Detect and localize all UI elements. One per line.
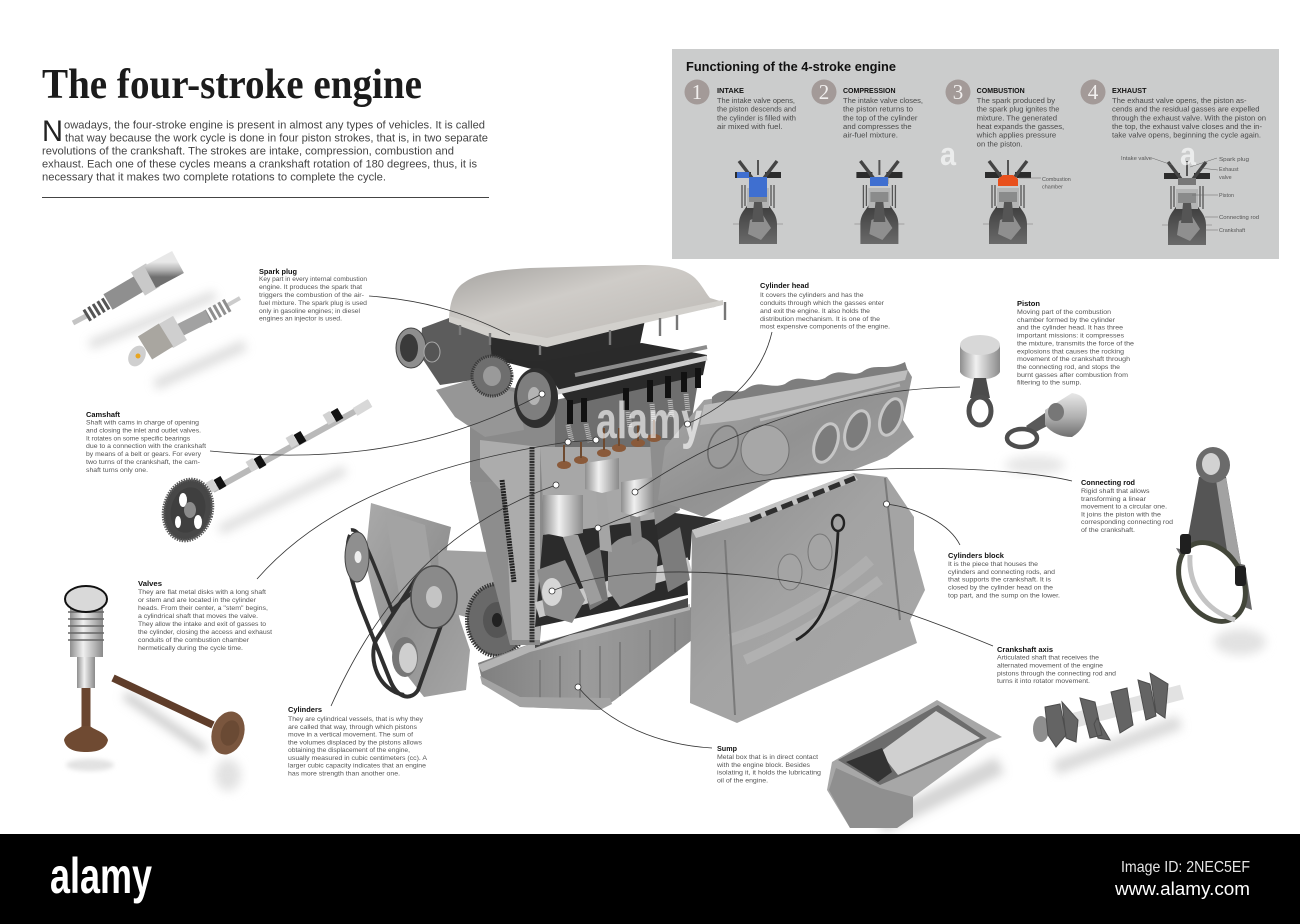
label: cylinders block: closed by the cylinder head on the xyxy=(948,585,1053,592)
detached cylinder head xyxy=(658,362,914,517)
step 1: intake: air mixed with fuel. xyxy=(717,122,782,131)
step 1: intake: 1 xyxy=(692,80,702,104)
label: camshaft: shaft turns only one. xyxy=(86,467,148,474)
title: The four-stroke engine xyxy=(42,62,422,108)
step 3: combustion: The spark produced by xyxy=(977,96,1055,105)
leader lines xyxy=(210,296,1072,748)
step 3: combustion: heat expands the gasses, xyxy=(977,122,1064,131)
label: camshaft: It rotates on some specific bearings xyxy=(86,435,191,442)
label: valves: conduits of the combustion chamber xyxy=(138,637,250,644)
camshaft gears on engine xyxy=(436,356,558,437)
label: piston: filtering to the sump. xyxy=(1017,380,1082,387)
engine watermark: alamy xyxy=(596,392,702,450)
label: crankshaft axis: turns it into rotator movement. xyxy=(997,678,1090,685)
step 4: exhaust xyxy=(1080,80,1266,245)
footer logo: alamy xyxy=(50,848,152,904)
label: cylinders: has more strength than another one. xyxy=(288,770,400,777)
intro paragraph: N xyxy=(42,115,63,148)
intro paragraph xyxy=(42,115,488,184)
label: cylinders xyxy=(288,705,428,777)
timing cover and accessory pulleys xyxy=(345,503,527,697)
label: spark plug: engines an injector is used. xyxy=(259,316,342,322)
label: sump: oil of the engine. xyxy=(717,777,768,784)
step 2: compression: 2 xyxy=(819,80,829,104)
label: crankshaft axis: alternated movement of the engine xyxy=(997,662,1103,669)
label: camshaft: two turns of the crankshaft, the cam- xyxy=(86,459,200,466)
label: piston: movement of the crankshaft through xyxy=(1017,356,1130,363)
step 4: exhaust: Piston xyxy=(1219,193,1234,199)
intro paragraph: necessary that it makes two complete rotations to complete the cycle. xyxy=(42,172,386,184)
label: piston: the connecting rod, and stops the xyxy=(1017,364,1120,371)
label: valves: a cylindrical shaft that moves the valve. xyxy=(138,613,258,620)
label: spark plug: Spark plug xyxy=(259,267,297,276)
label: spark plug: Key part in every internal combustion xyxy=(259,276,367,283)
step 2: compression: the piston returns to xyxy=(843,105,913,114)
label: spark plug: fuel mixture. The spark plug is used xyxy=(259,300,367,307)
label: spark plug: engine. It produces the spark that xyxy=(259,284,362,291)
part: pistons xyxy=(960,335,1087,474)
label: valves: They are flat metal disks with a long shaft xyxy=(138,589,266,596)
panel: functioning of the 4-stroke engine: a xyxy=(940,136,956,172)
label: valves xyxy=(138,579,272,652)
label: piston xyxy=(1017,299,1134,387)
label: valves: Valves xyxy=(138,579,162,588)
label: piston: and the cylinder head. It has three xyxy=(1017,325,1123,332)
label: camshaft: Camshaft xyxy=(86,410,120,419)
label: cylinders block: It is the piece that houses the xyxy=(948,561,1038,568)
label: valves: heads. From their center, a "stem" begins, xyxy=(138,605,268,612)
label: valves: the cylinder, closing the access and exhaust xyxy=(138,629,272,636)
label: cylinders: larger cubic capacity indicates that an engine xyxy=(288,762,426,770)
step 3: combustion: chamber xyxy=(1042,184,1063,190)
step 4: exhaust: Connecting rod xyxy=(1219,215,1259,221)
label: spark plug: triggers the combustion of the air- xyxy=(259,292,364,299)
website: www.alamy.com xyxy=(1114,879,1250,899)
label: crankshaft axis: pistons through the connecting rod and xyxy=(997,670,1116,677)
step 1: intake: The intake valve opens, xyxy=(717,96,795,105)
label: cylinders block: Cylinders block xyxy=(948,551,1005,560)
label: cylinder head: conduits through which the gasses enter xyxy=(760,300,885,307)
part: crankshaft xyxy=(1033,673,1182,768)
step 2: compression: The intake valve closes, xyxy=(843,96,923,105)
part: oil sump xyxy=(827,700,1002,828)
label: cylinders: usually measured in cubic centimeters (cc). A xyxy=(288,755,428,762)
label: cylinder head: most expensive components of the engine. xyxy=(760,324,890,330)
intro paragraph: revolutions of the crankshaft. The strokes are intake, compression, combustion and xyxy=(42,146,454,158)
panel: functioning of the 4-stroke engine: a xyxy=(1180,136,1196,172)
step 4: exhaust: valve xyxy=(1219,175,1232,181)
label: camshaft: by means of a belt or gears. For every xyxy=(86,451,202,458)
label: sump: with the engine block. Besides xyxy=(716,762,811,769)
label: cylinders: the volumes displaced by the pistons allows xyxy=(288,739,423,746)
label: cylinder head xyxy=(760,281,890,330)
label: piston: chamber formed by the cylinder xyxy=(1017,317,1116,324)
detached cylinders block xyxy=(690,473,925,723)
label: camshaft: and closing the inlet and outlet valves. xyxy=(86,427,201,434)
intro paragraph: owadays, the four-stroke engine is present in almost any types of vehicles. It is called xyxy=(64,120,485,132)
label: valves: or stem and are located in the cylinder xyxy=(138,597,257,604)
label: connecting rod: Connecting rod xyxy=(1081,478,1135,487)
step 4: exhaust: 4 xyxy=(1088,80,1099,104)
main engine cutaway xyxy=(345,265,925,723)
sump on engine xyxy=(478,598,692,710)
step 4: exhaust: the top, the exhaust valve closes and the in- xyxy=(1112,122,1262,131)
label: connecting rod xyxy=(1081,478,1173,534)
step 3: combustion: on the piston. xyxy=(977,139,1023,148)
label: cylinders block: that supports the crankshaft. It is xyxy=(948,577,1052,584)
label: piston: Piston xyxy=(1017,299,1040,308)
label: piston: Moving part of the combustion xyxy=(1017,309,1111,316)
label: piston: explosions that causes the rocking xyxy=(1017,348,1124,355)
step 4: exhaust: Crankshaft xyxy=(1219,228,1246,234)
label: connecting rod: of the crankshaft. xyxy=(1081,527,1135,534)
step 4: exhaust: take valve opens, beginning the cycle again. xyxy=(1112,131,1261,140)
label: cylinder head: distribution mechanism. It is one of the xyxy=(760,316,880,323)
label: connecting rod: It joins the piston with the xyxy=(1081,511,1161,518)
step 1: intake xyxy=(684,80,796,244)
label: cylinders: are called that way, through which pistons xyxy=(288,724,418,731)
label: sump xyxy=(716,744,821,784)
step 4: exhaust: Spark plug xyxy=(1219,157,1249,163)
valve train and springs xyxy=(485,343,707,469)
cylinder cutaway interior xyxy=(535,370,722,627)
step 1: intake: the cylinder is filled with xyxy=(717,113,796,122)
step 2: compression xyxy=(812,80,923,244)
label: crankshaft axis: Articulated shaft that receives the xyxy=(997,654,1099,662)
label: cylinders: obtaining the displacement of the engine, xyxy=(288,747,410,754)
label: piston: the mixture, transmits the force of the xyxy=(1017,340,1134,347)
label: spark plug: only in gasoline engines; in diesel xyxy=(259,308,361,315)
step 2: compression: the top of the cylinder xyxy=(843,113,918,122)
pistons and rods in engine xyxy=(543,458,654,605)
crankshaft in engine xyxy=(537,527,690,623)
step 3: combustion xyxy=(946,80,1071,244)
part: connecting rod xyxy=(1165,447,1266,655)
intro paragraph: exhaust. Each one of these cycles means a crankshaft rotation of 180 degrees, thus, it is xyxy=(42,158,477,170)
label: cylinders block xyxy=(948,551,1060,599)
step 2: compression: and compresses the xyxy=(843,122,912,131)
label: sump: Sump xyxy=(717,744,737,753)
label: camshaft: Shaft with cams in charge of opening xyxy=(86,420,199,426)
step 4: exhaust: Exhaust xyxy=(1219,167,1239,173)
label: crankshaft axis xyxy=(997,645,1116,685)
intake and valve cover xyxy=(396,265,725,385)
label: camshaft xyxy=(86,410,206,474)
intro paragraph: that way because the work cycle is done in four piston strokes, that is, in two separate xyxy=(65,132,488,144)
step 4: exhaust: cends and the residual gasses are expelled xyxy=(1112,105,1260,114)
label: cylinder head: Cylinder head xyxy=(760,281,809,290)
step 4: exhaust: EXHAUST xyxy=(1112,88,1147,95)
label: spark plug xyxy=(259,267,367,322)
step 1: intake: INTAKE xyxy=(717,88,744,95)
step 4: exhaust: Intake valve xyxy=(1121,156,1152,162)
label: valves: hermetically during the cycle time. xyxy=(138,645,243,652)
label: valves: They allow the intake and exit of gasses to xyxy=(138,621,266,628)
label: connecting rod: corresponding connecting rod xyxy=(1081,519,1173,526)
step 3: combustion: mixture. The generated xyxy=(977,113,1057,122)
step 1: intake: the piston descends and xyxy=(717,105,796,114)
step 4: exhaust: The exhaust valve opens, the piston as- xyxy=(1112,96,1247,105)
label: sump: Metal box that is in direct contact xyxy=(717,754,818,761)
label: cylinders block: cylinders and connecting rods, and xyxy=(948,569,1055,576)
label: cylinders: Cylinders xyxy=(288,705,322,714)
label: piston: important missions: it compresses xyxy=(1017,333,1125,340)
step 3: combustion: 3 xyxy=(953,80,963,104)
label: crankshaft axis: Crankshaft axis xyxy=(997,645,1053,654)
image id: Image ID: 2NEC5EF xyxy=(1121,859,1250,876)
panel heading: Functioning of the 4-stroke engine xyxy=(686,60,896,74)
label: connecting rod: Rigid shaft that allows xyxy=(1081,488,1150,495)
label: cylinders: They are cylindrical vessels, that is why they xyxy=(288,716,424,723)
label: camshaft: due to a connection with the crankshaft xyxy=(86,443,206,450)
label: cylinder head: and exit the engine. It also holds the xyxy=(760,308,870,315)
part: camshaft xyxy=(157,403,370,546)
panel: functioning of the 4-stroke engine xyxy=(672,49,1279,259)
part: spark plugs xyxy=(73,262,245,385)
front block wall xyxy=(470,380,555,645)
step 4: exhaust: through the exhaust valve. With the piston on xyxy=(1112,113,1266,122)
step 3: combustion: which applies pressure xyxy=(976,131,1056,140)
label: piston: burnt gasses after combustion from xyxy=(1017,372,1128,379)
label: connecting rod: movement to a circular one. xyxy=(1081,504,1167,511)
label: cylinder head: It covers the cylinders and has the xyxy=(760,292,864,299)
label: sump: isolating it, it holds the lubricating xyxy=(717,770,821,777)
dipstick xyxy=(796,532,838,640)
label: cylinders: move in a vertical movement. The sum of xyxy=(288,732,413,738)
label: connecting rod: transforming a linear xyxy=(1081,496,1147,503)
step 3: combustion: Combustion xyxy=(1042,177,1071,183)
footer bar xyxy=(0,834,1300,924)
label: cylinders block: top part, and the sump on the lower. xyxy=(948,592,1060,599)
part: tappet and valves xyxy=(64,586,250,791)
step 3: combustion: COMBUSTION xyxy=(977,88,1025,95)
step 2: compression: COMPRESSION xyxy=(843,88,896,95)
step 3: combustion: the spark plug ignites the xyxy=(977,105,1059,114)
step 2: compression: air-fuel mixture. xyxy=(843,131,898,140)
